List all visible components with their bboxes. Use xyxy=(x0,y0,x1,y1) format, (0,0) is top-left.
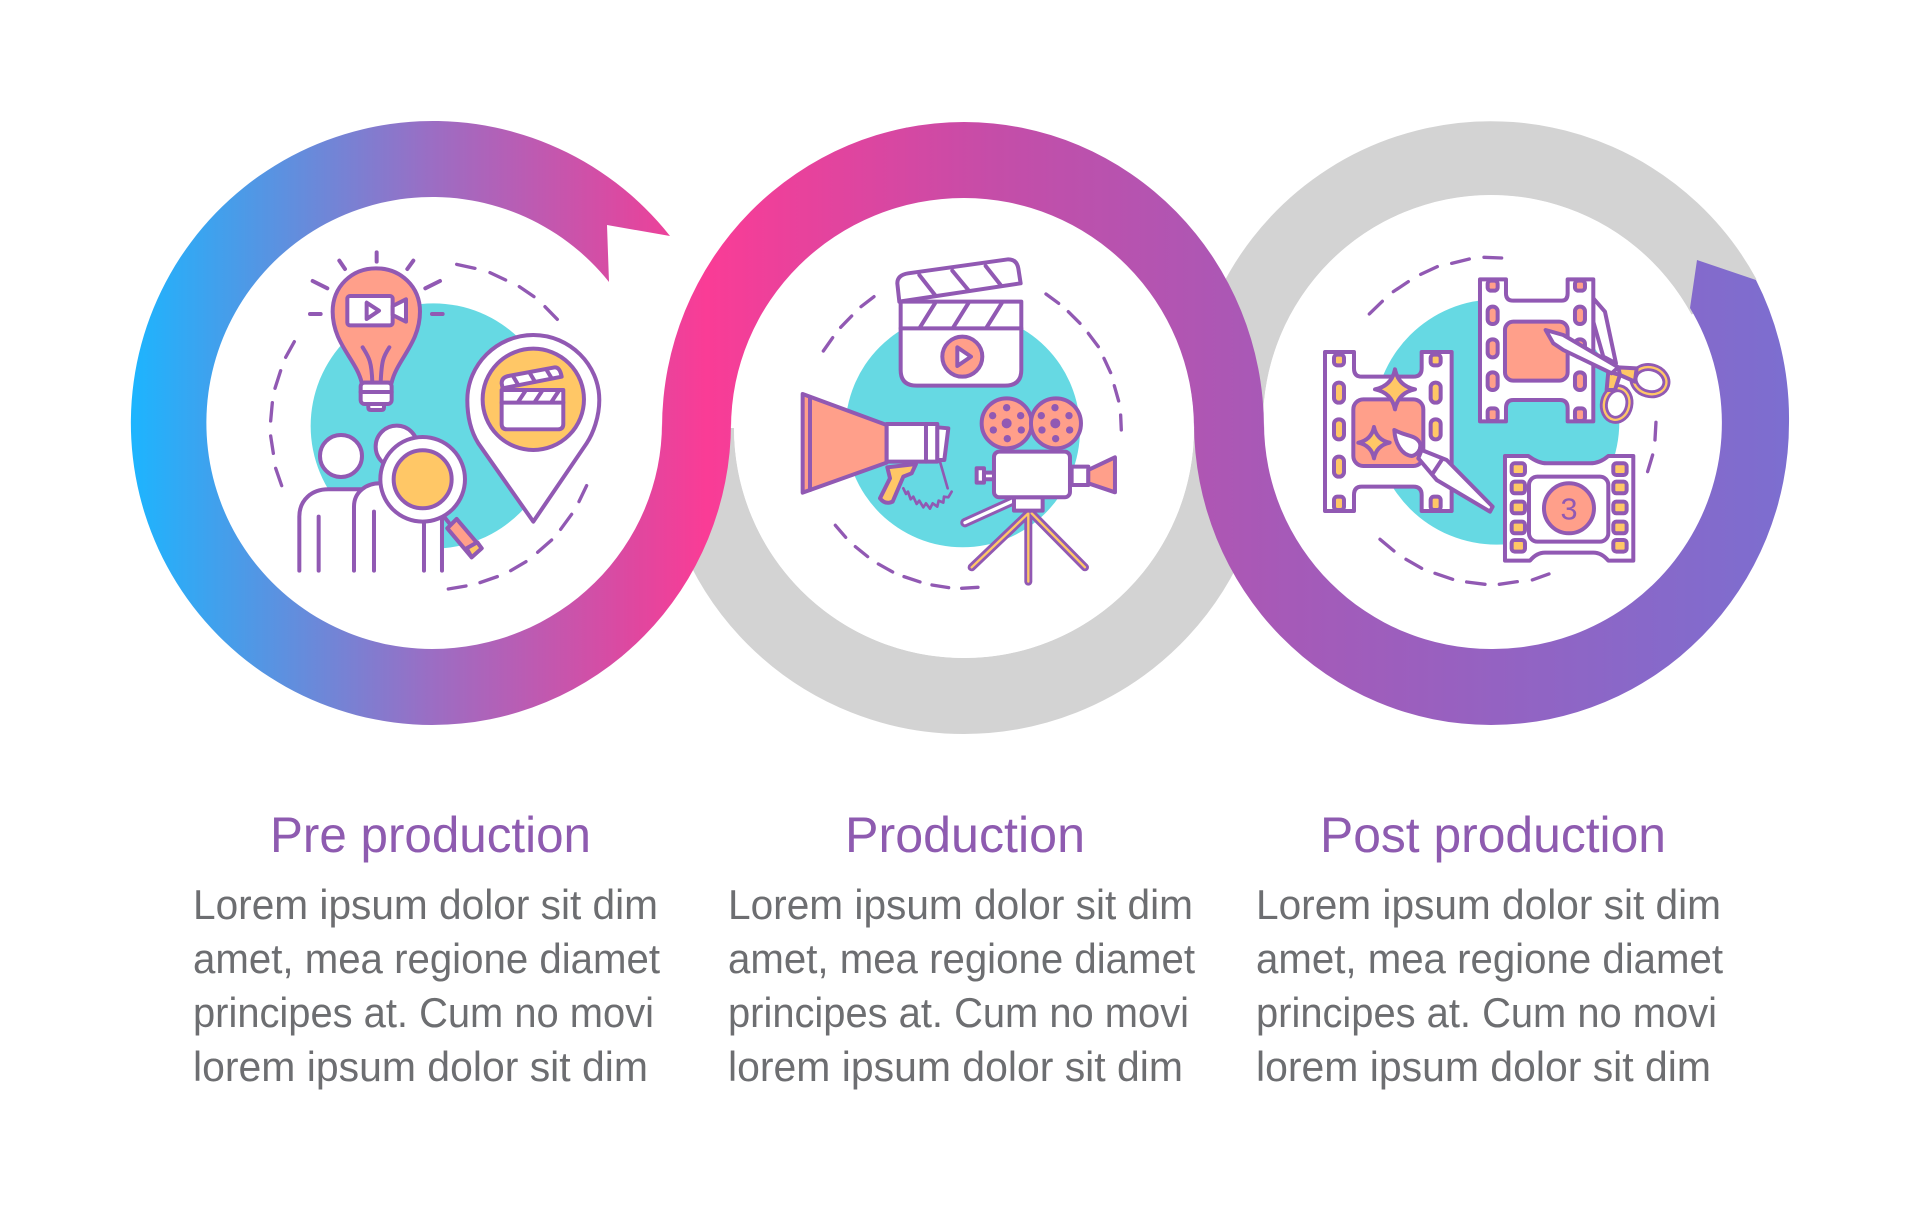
dashed orbit xyxy=(271,264,587,589)
teal disc xyxy=(1374,299,1619,545)
body text: post production: amet, mea regione diamet xyxy=(1256,935,1723,982)
icon: production xyxy=(803,259,1121,588)
dashed orbit xyxy=(1369,257,1656,584)
text block: production xyxy=(728,807,1195,1090)
icon: film countdown frame xyxy=(1505,456,1633,561)
dashed orbit xyxy=(823,294,1121,588)
icon: megaphone xyxy=(803,394,952,509)
body text: post production xyxy=(1256,881,1723,1090)
icon: pre production xyxy=(271,252,599,589)
gradient ribbon with arrow ends xyxy=(131,121,1789,725)
body text: production: lorem ipsum dolor sit dim xyxy=(728,1043,1183,1090)
body text: pre production: amet, mea regione diamet xyxy=(193,935,660,982)
body text: production xyxy=(728,881,1195,1090)
gray background rings xyxy=(201,158,1724,696)
text block: post production xyxy=(1256,807,1723,1090)
body text: post production: Lorem ipsum dolor sit dim xyxy=(1256,881,1721,928)
body text: production: Lorem ipsum dolor sit dim xyxy=(728,881,1193,928)
body text: production: amet, mea regione diamet xyxy=(728,935,1195,982)
icon: film strip with scissors xyxy=(1480,279,1670,422)
body text: pre production: lorem ipsum dolor sit dim xyxy=(193,1043,648,1090)
icon: map pin with clapperboard xyxy=(467,335,599,522)
icon: light bulb with video camera xyxy=(310,252,443,410)
icon: film strip with brush xyxy=(1325,352,1493,512)
body text: pre production xyxy=(193,881,660,1090)
body text: pre production: principes at. Cum no movi xyxy=(193,989,654,1036)
body text: pre production: Lorem ipsum dolor sit dim xyxy=(193,881,658,928)
teal disc xyxy=(845,313,1080,547)
icon: film countdown frame: 3 xyxy=(1560,492,1578,526)
heading: post production: Post production xyxy=(1320,807,1666,863)
icon: people with magnifier xyxy=(299,426,482,571)
body text: production: principes at. Cum no movi xyxy=(728,989,1189,1036)
icon: film camera on tripod xyxy=(965,398,1115,582)
heading: pre production: Pre production xyxy=(270,807,591,863)
icon: post production xyxy=(1325,257,1670,584)
heading: production: Production xyxy=(845,807,1085,863)
body text: post production: lorem ipsum dolor sit dim xyxy=(1256,1043,1711,1090)
icon: clapperboard xyxy=(897,259,1021,386)
body text: post production: principes at. Cum no movi xyxy=(1256,989,1717,1036)
teal disc xyxy=(311,303,556,549)
text block: pre production xyxy=(193,807,660,1090)
